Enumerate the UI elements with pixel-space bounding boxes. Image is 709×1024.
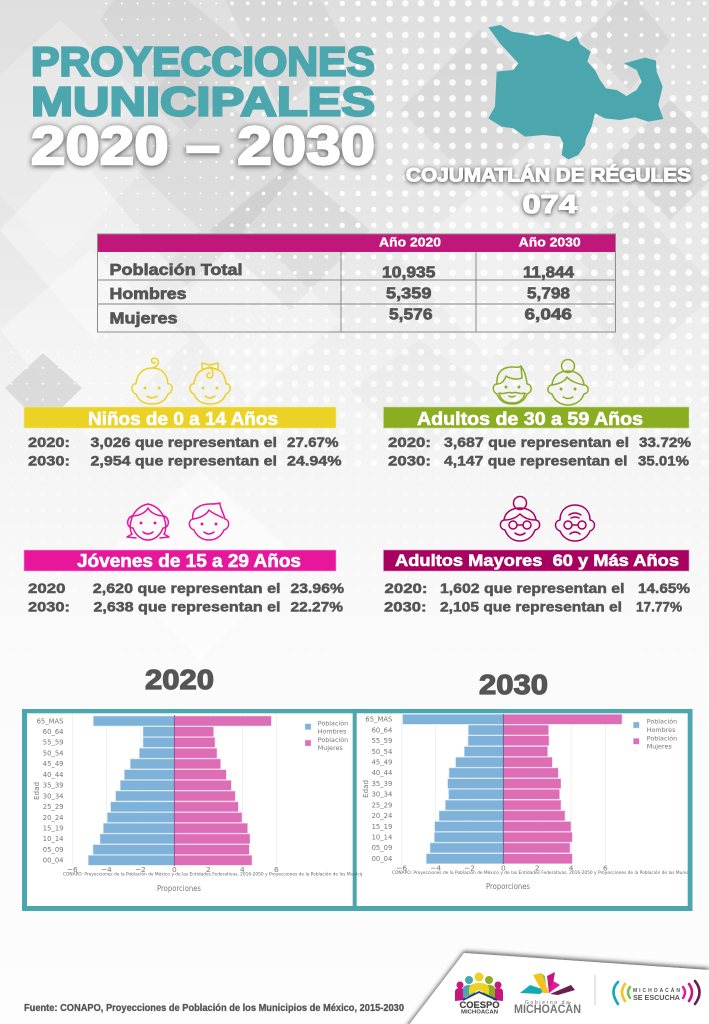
age labels 2020: 15_19 [43, 824, 64, 832]
stats: ninos 2020: 2020: [28, 434, 70, 450]
age labels 2020: 40_44 [43, 771, 64, 779]
stats: jovenes 2020 [28, 580, 345, 596]
age labels 2020: 25_29 [43, 803, 64, 811]
icon: young woman [127, 504, 169, 540]
x tick labels 2020: 6 [274, 865, 279, 874]
legend 2020: Mujeres [318, 744, 343, 752]
logo: gobierno de michoacan [514, 972, 581, 1016]
row: mujeres: 5,576 [389, 306, 433, 323]
y axis title 2030: Edad [361, 780, 370, 798]
stats: adultos 2030: 4,147 que representan el [444, 452, 628, 468]
stats: jovenes 2030: 22.27% [290, 598, 344, 614]
logo: coespo [455, 972, 503, 1016]
age labels 2020: 60_64 [43, 728, 64, 736]
age labels 2030: 65_MAS [365, 716, 392, 724]
age labels 2030: 50_54 [372, 748, 392, 756]
stats: adultos mayores 2020 [384, 580, 691, 596]
x tick labels 2020: 0 [172, 865, 177, 874]
row: mujeres: Mujeres [110, 310, 178, 328]
stats: ninos 2020: 3,026 que representan el [90, 434, 277, 450]
stats: jovenes 2020: 23.96% [290, 580, 345, 596]
stats: ninos 2020 [28, 434, 339, 450]
x tick labels 2020: −6 [67, 865, 78, 874]
row: hombres: 5,798 [527, 285, 570, 302]
stats: jovenes 2020: 2020 [28, 580, 66, 596]
table header [98, 234, 616, 252]
age labels 2030: 20_24 [372, 812, 392, 820]
row: poblacion total: 11,844 [523, 264, 574, 281]
bars: hombres 2020 [88, 716, 174, 865]
chart frame [22, 709, 692, 911]
panel: adultos mayores [384, 496, 691, 614]
heading bar: ninos: Niños de 0 a 14 Años [88, 409, 278, 429]
icon: elderly man [556, 505, 594, 541]
logo: gobierno de michoacan: Gobierno de [525, 1000, 569, 1006]
age labels 2020: 45_49 [43, 760, 64, 768]
stats: adultos mayores 2030: 17.77% [636, 598, 683, 614]
legend 2020: Hombres [318, 728, 347, 736]
age labels 2020: 35_39 [43, 782, 64, 790]
footer white panel [405, 953, 709, 1024]
heading: chart 2030: 2030 [479, 669, 548, 700]
age labels 2020: 65_MAS [37, 717, 64, 725]
heading bar: adultos: Adultos de 30 a 59 Años [417, 409, 643, 429]
municipality code: 074 [522, 189, 578, 219]
x tick labels 2020: −2 [135, 865, 146, 874]
icon: elderly woman [500, 496, 540, 541]
panel: jovenes [24, 503, 345, 614]
stats: jovenes 2020: 2,620 que representan el [93, 580, 280, 596]
stats: adultos mayores 2030: 2030: [384, 598, 426, 614]
age labels 2030: 30_34 [372, 791, 392, 799]
icon: baby boy [132, 358, 172, 404]
source text: Fuente: CONAPO, Proyecciones de Población de los Municipios de México, 2015-2030 [24, 1003, 404, 1014]
title [31, 38, 375, 176]
stats: adultos mayores 2030 [384, 598, 683, 614]
age labels 2030: 55_59 [372, 737, 392, 745]
stats: adultos 2020: 3,687 que representan el [444, 434, 629, 450]
row: hombres: 5,359 [386, 285, 432, 302]
stats: ninos 2030: 2,954 que representan el [90, 452, 277, 468]
logo: michoacan se escucha: MICHOACÁN [633, 987, 680, 994]
icon: adult man [493, 366, 531, 404]
stats: jovenes 2030: 2030: [28, 598, 70, 614]
row: poblacion total [110, 262, 574, 281]
stats: jovenes 2030: 2,638 que representan el [94, 598, 280, 614]
stats: ninos 2030 [28, 452, 342, 468]
heading bar: jovenes: Jóvenes de 15 a 29 Años [77, 551, 301, 571]
age labels 2020: 05_09 [43, 846, 64, 854]
legend 2030: Hombres [647, 726, 676, 734]
stats: adultos mayores 2030: 2,105 que representan el [440, 598, 622, 614]
x tick labels 2020: −4 [101, 865, 112, 874]
table header: Año 2020 [379, 236, 441, 250]
x tick labels 2030: 2 [535, 864, 540, 872]
x axis title 2030: Proporciones [486, 882, 530, 891]
legend 2020: Población [318, 720, 348, 728]
age labels 2030 [365, 716, 392, 863]
age labels 2020: 00_04 [43, 857, 64, 865]
stats: ninos 2020: 27.67% [287, 434, 339, 450]
stats: adultos 2030: 2030: [388, 452, 431, 468]
age labels 2030: 10_14 [372, 834, 392, 842]
age labels 2030: 25_29 [372, 801, 392, 809]
chart: population pyramid 2030 [361, 714, 709, 891]
icon: baby girl [190, 363, 230, 404]
x axis title 2020: Proporciones [157, 884, 201, 893]
icon: young man [189, 503, 229, 540]
row: poblacion total: 10,935 [382, 264, 436, 281]
x tick labels 2030: −4 [430, 864, 441, 872]
stats: ninos 2030: 2030: [28, 452, 70, 468]
stats: adultos 2030: 35.01% [638, 452, 690, 468]
age labels 2030: 05_09 [372, 844, 392, 852]
row: mujeres: 6,046 [524, 306, 572, 323]
logo: michoacan se escucha [614, 981, 700, 1004]
x tick labels 2030: 6 [603, 864, 608, 872]
heading bar: adultos [384, 407, 689, 429]
chart: population pyramid 2020 [32, 714, 394, 893]
title line: municipales: MUNICIPALES [31, 78, 375, 124]
age labels 2020: 20_24 [43, 814, 64, 822]
age labels 2030: 45_49 [372, 758, 392, 766]
stats: adultos 2020 [388, 434, 692, 450]
x tick labels 2020: 2 [206, 865, 211, 874]
x tick labels 2030: −2 [464, 864, 475, 872]
source note 2030: CONAPO: Proyecciones de la Población de México y de las Entidades Federativas, 2016-2050 y Proyecciones de la Población de los Municipios de México [392, 870, 709, 875]
age labels 2020: 55_59 [43, 739, 64, 747]
municipality name: COJUMATLÁN DE RÉGULES [406, 164, 691, 186]
logo: coespo: MICHOACAN [461, 1010, 498, 1016]
heading: chart 2020: 2020 [145, 664, 214, 695]
stats: ninos 2030: 24.94% [287, 452, 342, 468]
age labels 2030: 60_64 [372, 726, 392, 734]
logo: michoacan se escucha: SE ESCUCHA [633, 993, 681, 1002]
legend 2020: Población [318, 736, 348, 744]
panel: ninos [24, 358, 342, 468]
table header: Año 2030 [519, 236, 581, 250]
icon: municipality map [488, 25, 663, 159]
age labels 2020: 30_34 [43, 792, 64, 800]
row: mujeres [110, 306, 572, 328]
bars: mujeres 2020 [174, 716, 271, 865]
stats: adultos 2020: 2020: [388, 434, 431, 450]
x tick labels 2030 [396, 864, 608, 872]
title line: proyecciones: PROYECCIONES [31, 38, 375, 84]
stats: adultos mayores 2020: 1,602 que representan el [440, 580, 624, 596]
age labels 2030: 00_04 [372, 855, 392, 863]
stats: jovenes 2030 [28, 598, 344, 614]
age labels 2020: 50_54 [43, 750, 64, 758]
icon: adult woman [548, 360, 588, 405]
row: hombres [110, 285, 570, 303]
legend 2020 [305, 720, 348, 752]
heading bar: ninos [24, 407, 336, 429]
age labels 2030: 15_19 [372, 823, 392, 831]
bars: mujeres 2030 [503, 714, 622, 864]
logo: coespo: COESPO [460, 1000, 500, 1010]
bars: hombres 2030 [403, 714, 503, 864]
age labels 2030: 35_39 [372, 780, 392, 788]
source note 2020: CONAPO: Proyecciones de la Población de México y de las Entidades Federativas, 2016-2050 y Proyecciones de la Población de los Municipios de México [63, 872, 394, 876]
panel: adultos [384, 360, 692, 468]
logo: gobierno de michoacan: MICHOACÁN [514, 1003, 581, 1016]
legend 2030 [633, 718, 677, 750]
row: poblacion total: Población Total [110, 262, 242, 279]
title line: years: 2020 – 2030 [31, 116, 375, 176]
x tick labels 2030: −6 [396, 864, 407, 872]
age labels 2020: 10_14 [43, 835, 64, 843]
y axis title 2020: Edad [32, 782, 41, 800]
legend 2030: Población [647, 734, 677, 742]
legend 2030: Población [647, 718, 677, 726]
population table [98, 234, 616, 332]
stats: adultos 2020: 33.72% [639, 434, 692, 450]
row: hombres: Hombres [110, 286, 187, 303]
stats: adultos 2030 [388, 452, 690, 468]
age labels 2030: 40_44 [372, 769, 392, 777]
x tick labels 2030: 0 [501, 864, 506, 872]
heading bar: jovenes [24, 550, 336, 571]
stats: adultos mayores 2020: 14.65% [638, 580, 691, 596]
divider [594, 975, 596, 1005]
heading bar: adultos mayores: Adultos Mayores 60 y Más Años [395, 551, 679, 570]
x tick labels 2020: 4 [240, 865, 245, 874]
x tick labels 2030: 4 [569, 864, 574, 872]
stats: adultos mayores 2020: 2020: [384, 580, 428, 596]
x tick labels 2020 [67, 865, 279, 874]
age labels 2020 [37, 717, 64, 865]
legend 2030: Mujeres [647, 742, 672, 750]
